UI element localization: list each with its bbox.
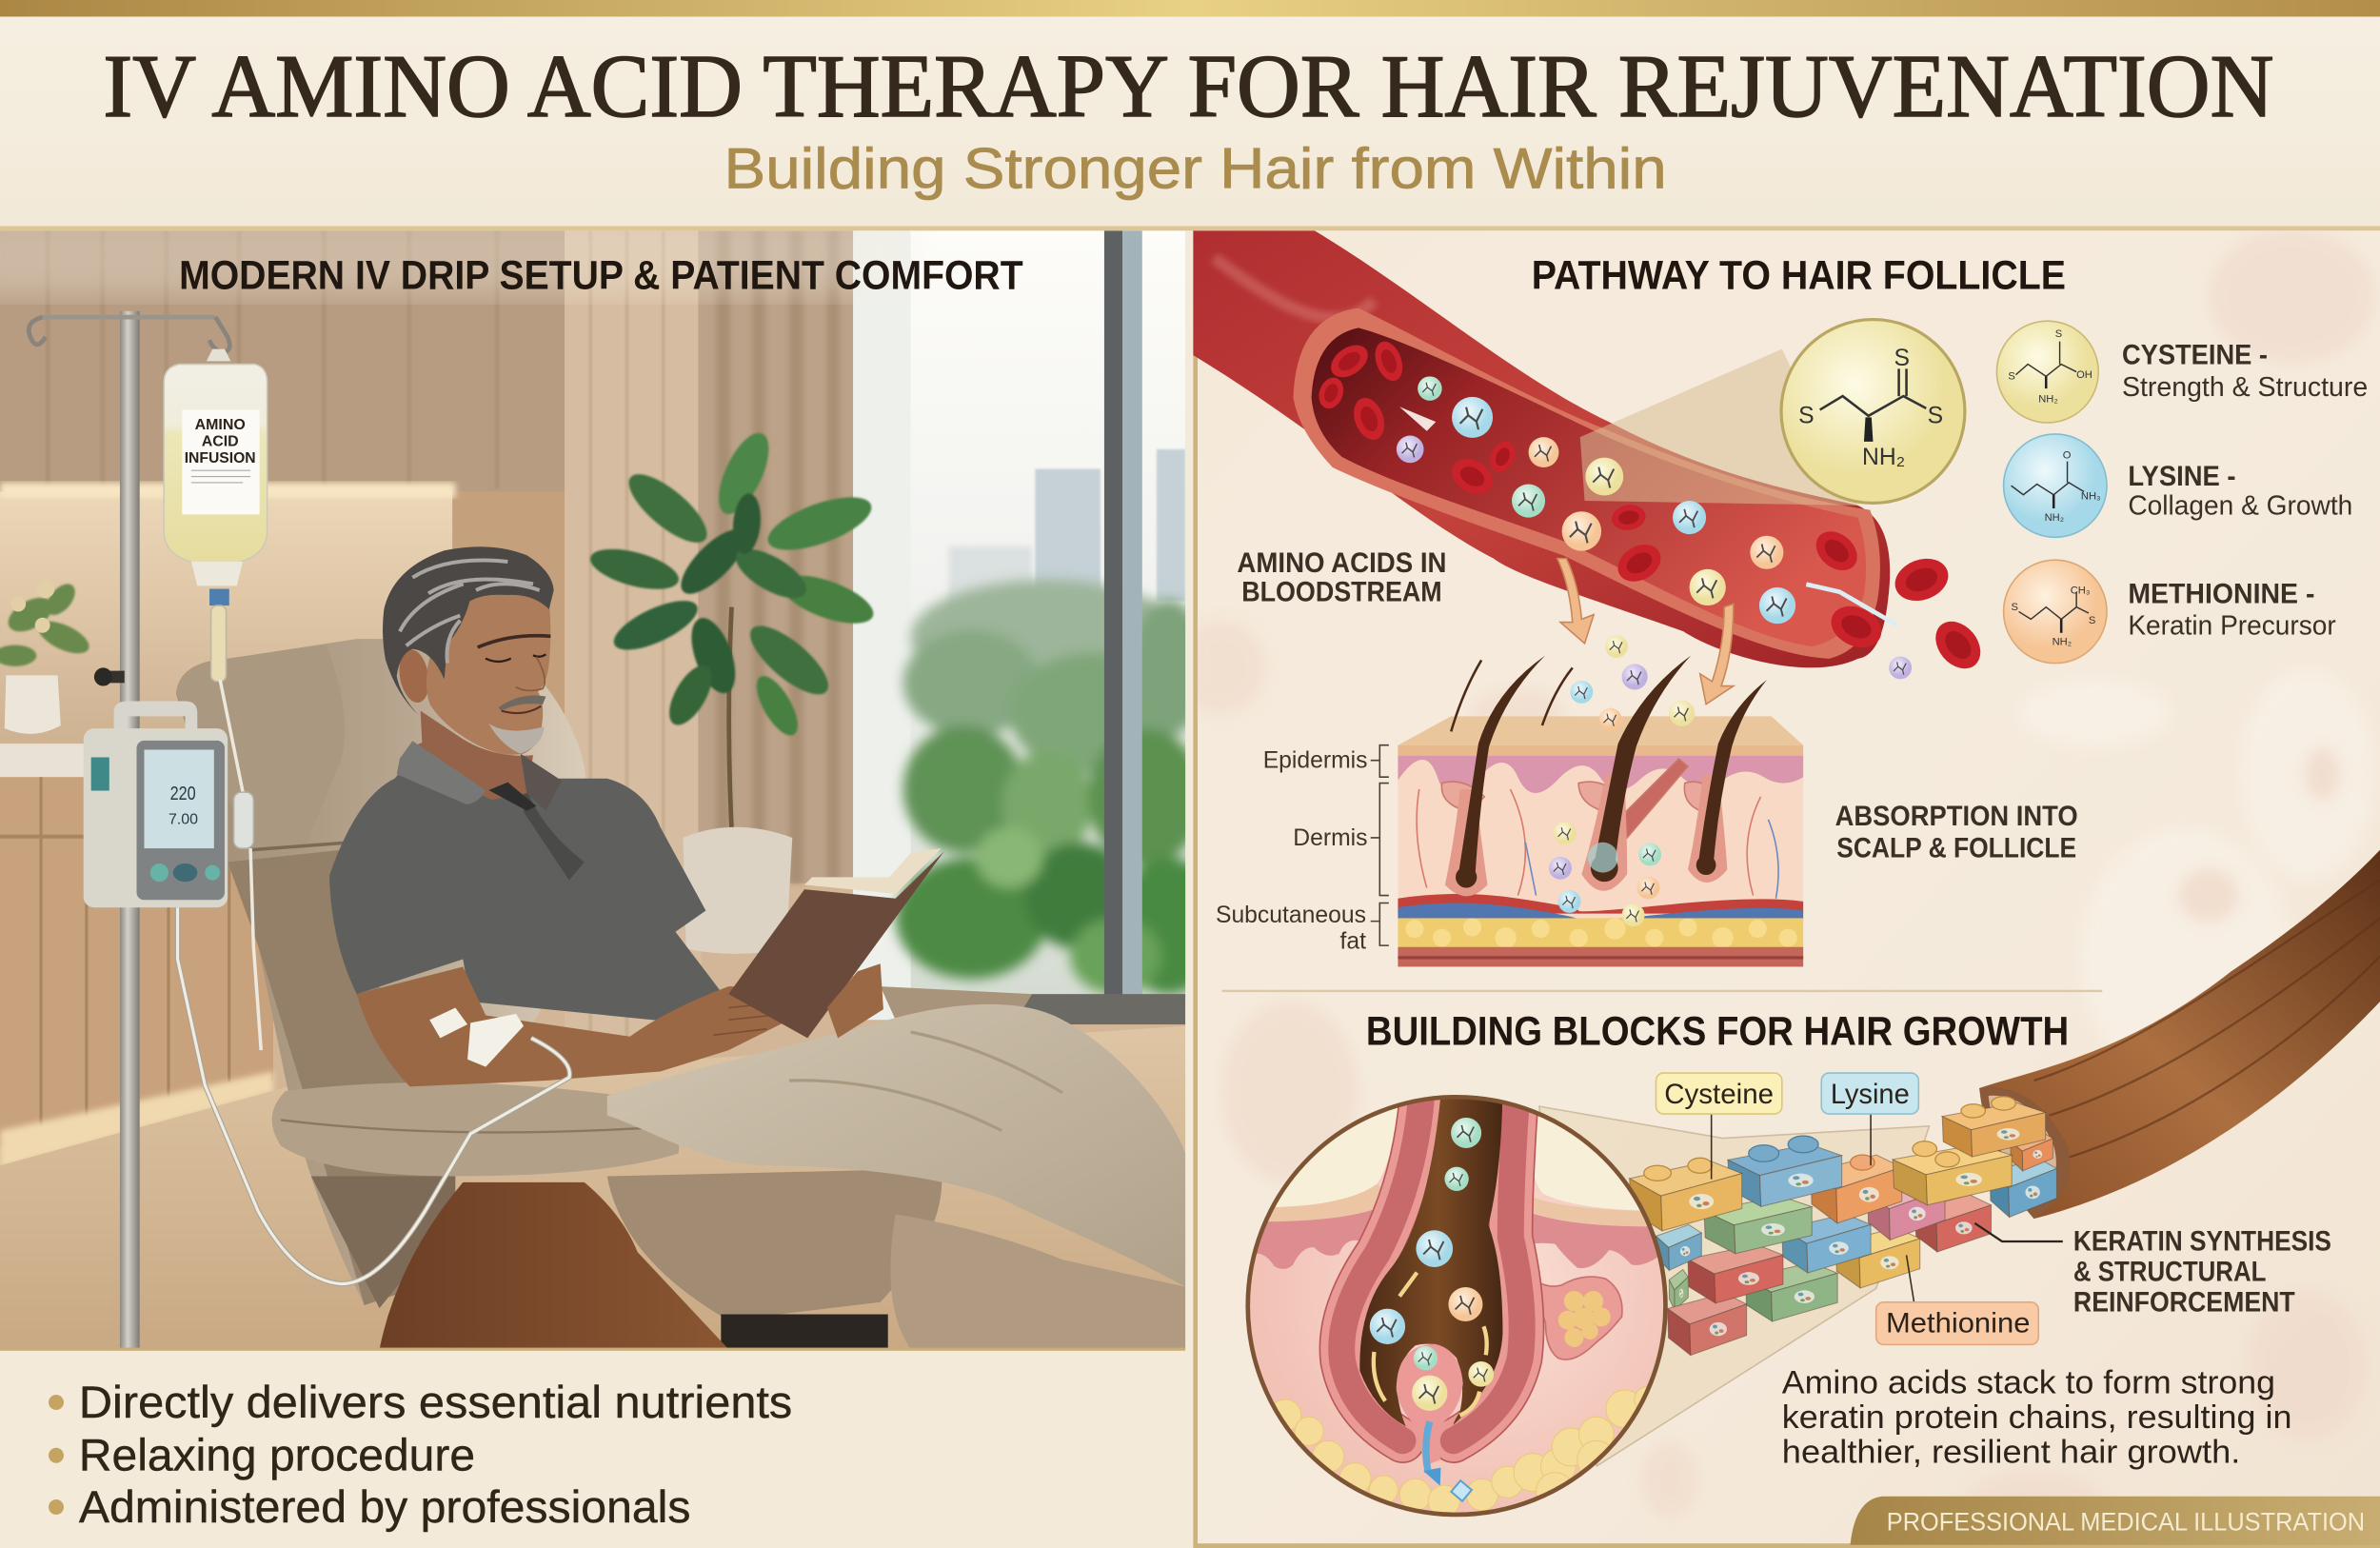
stratum bands [1257,1183,1390,1222]
tag: cysteine [1656,1073,1782,1180]
footrest [890,1214,1185,1349]
armrest [272,1082,679,1176]
right potted plant [586,426,879,954]
section heading: building blocks: BUILDING BLOCKS FOR HAIR GROWTH [1366,1009,2069,1055]
flow arrows [1374,1273,1487,1416]
cysteine badge: OH [2076,369,2092,381]
blood vessel [1193,230,1890,667]
methionine badge: S [2012,602,2018,613]
tag: methionine [1876,1255,2038,1344]
arm and hands [357,966,793,1086]
lower tubing [178,907,569,1284]
upper tubing [220,680,261,1050]
IV bag [164,349,268,682]
tag: cysteine: Cysteine [1664,1079,1774,1110]
large cysteine molecule: S [1894,346,1910,371]
chair back [176,639,600,1305]
large cysteine molecule: S [1798,404,1815,429]
methionine badge: CH₃ [2071,585,2090,596]
room background [0,230,1221,1349]
lysine label: LYSINE - [2128,461,2236,492]
floating amino particles [1549,635,1912,926]
skin layer labels: Epidermis [1263,748,1368,774]
polo shirt [329,775,720,1021]
footer banner [1851,1497,2380,1545]
label: absorption: ABSORPTION INTO [1835,801,2078,832]
cysteine label: CYSTEINE - [2122,340,2268,371]
methionine badge: S [2089,615,2095,626]
fat cells [1269,1387,1659,1517]
cysteine badge: S [2055,328,2062,340]
large cysteine molecule [1781,320,1965,503]
divider [1221,990,2102,992]
tag: lysine: Lysine [1831,1079,1910,1110]
tag: lysine [1821,1073,1918,1165]
window trees [896,580,1221,994]
cysteine label: Strength & Structure [2122,372,2368,403]
skin layer labels: fat [1339,928,1366,954]
cysteine badge: S [2008,371,2015,383]
IV pole [29,311,229,1349]
sebaceous and sheath lobes [1441,759,1718,838]
neck [400,711,533,800]
large cysteine molecule: S [1928,404,1943,429]
keratin blocks [1630,1097,2056,1356]
skin layer labels: Subcutaneous [1216,903,1366,928]
cysteine label [2122,340,2368,403]
skin cross-section [1398,656,1803,966]
description paragraph: Amino acids stack to form strong [1782,1364,2275,1400]
infusion pump: 7.00 [169,812,198,828]
label: absorption: SCALP & FOLLICLE [1836,833,2076,864]
infusion pump [84,701,228,907]
heading haze [0,230,853,305]
lysine badge: O [2063,449,2072,461]
section heading: left: MODERN IV DRIP SETUP & PATIENT COMFORT [179,253,1023,299]
methionine label: METHIONINE - [2128,579,2314,610]
blue arrow [1426,1421,1430,1473]
label: amino acids in bloodstream: AMINO ACIDS IN [1237,547,1446,579]
description paragraph: healthier, resilient hair growth. [1782,1435,2240,1471]
top gold bar [0,0,2380,17]
pump readout: 220 [170,783,196,804]
description paragraph [1782,1364,2292,1471]
book [728,851,944,1038]
panel: right medical illustration [1180,228,2380,1548]
methionine badge: NH₂ [2053,637,2072,647]
section heading: pathway: PATHWAY TO HAIR FOLLICLE [1532,253,2066,299]
moustache and beard [498,695,545,711]
arrows out of vessel [1557,559,1734,705]
lysine label: Collagen & Growth [2128,490,2352,521]
benefit 3: Administered by professionals [79,1481,690,1532]
keratin synthesis callout: KERATIN SYNTHESIS [2073,1226,2331,1258]
collar [397,741,486,804]
label: amino acids in bloodstream: BLOODSTREAM [1241,576,1442,607]
hair follicles [1445,656,1767,896]
methionine label [2128,579,2336,641]
left vase plant [0,579,93,734]
large cysteine molecule: NH₂ [1862,445,1905,470]
magnifier cone [1580,349,1858,506]
zoom circle: follicle detail [1238,1085,1682,1530]
lysine badge: NH₃ [2081,490,2101,502]
keratin synthesis callout [1974,1223,2331,1318]
papilla [1397,1344,1463,1466]
far armrest [881,986,1032,1020]
cysteine badge [1996,321,2098,423]
hair strand [1979,850,2380,1219]
skin layer labels [1216,745,1389,954]
hair shaft [1359,1095,1502,1426]
wood side panel [380,1182,728,1349]
sebaceous gland [1514,1261,1622,1359]
cell background [1180,228,2375,1533]
header band [0,17,2380,230]
IV label text: ACID [202,434,239,450]
face [426,595,550,755]
center gutter [1185,230,1193,1548]
panel: benefits list [0,1348,1185,1548]
follicle sheath layers [1341,1092,1522,1440]
lower seat cushion [607,1168,942,1320]
ear [395,646,433,705]
subtitle: Building Stronger Hair from Within [724,136,1667,201]
skin layer labels: Dermis [1293,825,1368,851]
hair [383,546,554,716]
keratin synthesis callout: & STRUCTURAL [2073,1256,2266,1287]
particles [1451,1118,1481,1148]
cream skin surface [1238,1085,1406,1212]
cysteine badge: NH₂ [2038,393,2058,405]
magnifier cone to blocks [1539,1106,1929,1466]
tag: methionine: Methionine [1886,1308,2030,1340]
label: amino acids in bloodstream [1237,547,1446,607]
IV label text: AMINO [195,417,246,433]
bandage and IV site [429,1007,524,1067]
left hand on book [827,963,883,1038]
methionine label: Keratin Precursor [2128,610,2336,641]
escaping arrow [1806,585,1897,625]
red blood cells [1315,338,1990,678]
benefit 1: Directly delivers essential nutrients [79,1377,792,1427]
recliner chair [176,639,1185,1349]
IV label text [185,417,256,466]
amino acid particles in vessel [1397,376,1795,624]
lysine badge: NH₂ [2045,512,2064,524]
description paragraph: keratin protein chains, resulting in [1782,1399,2292,1436]
panel: IV drip photo scene [0,212,1221,1349]
IV label text: INFUSION [185,450,256,466]
methionine badge [2004,560,2107,664]
trousers [607,1004,1185,1287]
title: IV AMINO ACID THERAPY FOR HAIR REJUVENATION [103,37,2273,136]
keratin synthesis callout: REINFORCEMENT [2073,1286,2295,1318]
lysine badge [2004,434,2107,537]
man [329,546,944,1086]
brow and eyes [478,636,550,647]
lysine label [2128,461,2352,521]
benefit 2: Relaxing procedure [79,1430,475,1480]
head, drawn at detail scale [383,546,562,811]
label: absorption [1835,801,2078,864]
